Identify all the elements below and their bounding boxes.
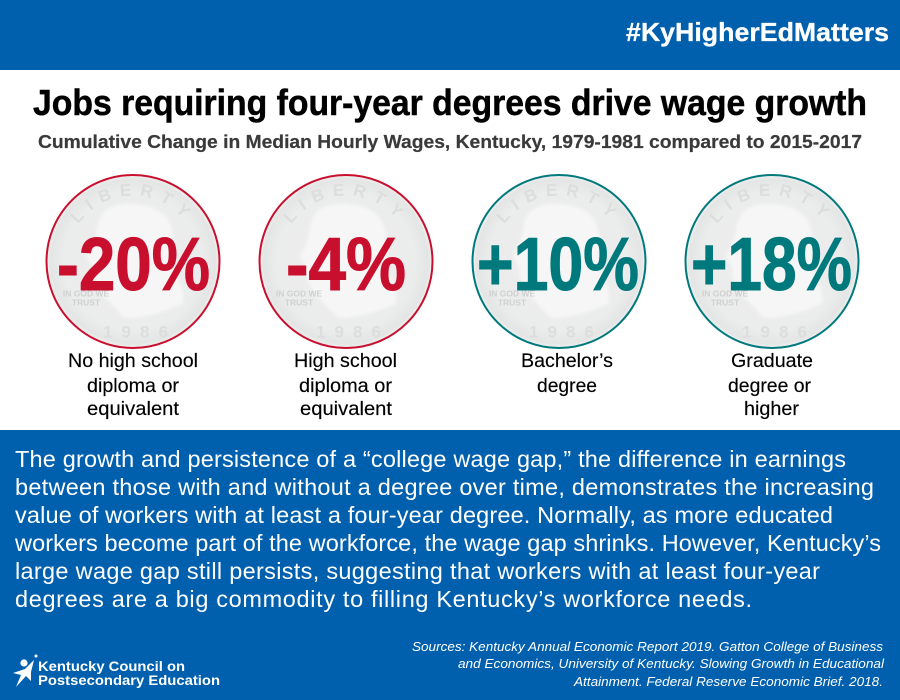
label: bachelor's: degree [537,375,597,397]
label: high school: High school [294,350,397,372]
sources: Sources: Kentucky Annual Economic Report 2019. Gatton College of Business [412,639,884,654]
coin: graduate +18%: 1986 [742,322,807,342]
coin: high school diploma -4%: 1986 [316,322,381,342]
sources: and Economics, University of Kentucky. Slowing Growth in Educational [458,656,885,671]
label: no high school: diploma or [87,375,180,397]
coin: graduate +18%: IN GOD WE [702,288,748,298]
label: no high school: equivalent [87,398,180,420]
body paragraph: The growth and persistence of a “college wage gap,” the difference in earnings [15,446,846,472]
sources: Attainment. Federal Reserve Economic Brief. 2018. [573,674,883,689]
body paragraph: between those with and without a degree over time, demonstrates the increasing [15,474,874,500]
logo text [38,659,220,688]
coin: bachelor's +10%: TRUST [498,298,527,308]
label: graduate [728,350,813,420]
label: no high school: No high school [68,350,198,372]
coin: graduate +18% [684,174,860,349]
coin: graduate +18%: TRUST [711,298,740,308]
label: graduate: higher [744,398,800,420]
label: bachelor's: Bachelor’s [521,350,613,372]
coin: bachelor's +10%: 1986 [529,322,594,342]
coin: high school diploma -4%: IN GOD WE [276,288,322,298]
logo text: Postsecondary Education [38,673,220,688]
body paragraph: value of workers with at least a four-year degree. Normally, as more educated [15,502,833,528]
subtitle: Cumulative Change in Median Hourly Wages, Kentucky, 1979-1981 compared to 2015-2017 [38,132,862,152]
logo text: Kentucky Council on [38,659,185,674]
coin: no high school diploma -20% [46,174,220,349]
coin: bachelor's +10%: IN GOD WE [489,288,535,298]
coin: high school diploma -4% [258,174,434,349]
coin: no high school diploma -20%: LIBERTY [70,184,191,223]
title: Jobs requiring four-year degrees drive wage growth [33,82,867,123]
label: graduate: Graduate [731,350,813,372]
label: high school: diploma or [299,375,393,397]
logo [13,654,220,688]
coin: no high school diploma -20%: TRUST [72,298,101,308]
body paragraph: large wage gap still persists, suggesting that workers with at least four-year [15,558,820,584]
body paragraph: degrees are a big commodity to filling Kentucky’s workforce needs. [15,586,752,612]
coin: graduate +18%: LIBERTY [710,184,830,223]
label: no high school [68,350,198,420]
label: graduate: degree or [728,375,811,397]
label: high school: equivalent [300,398,393,420]
coin: high school diploma -4%: TRUST [285,298,314,308]
header band [0,0,900,70]
label: high school [294,350,397,420]
coin: bachelor's +10% [472,174,646,349]
coin: high school diploma -4%: LIBERTY [284,184,404,223]
coin: no high school diploma -20%: 1986 [103,322,168,342]
value: +18% [691,222,852,306]
sources [412,639,885,689]
body paragraph [14,446,881,612]
value: +10% [477,222,639,306]
coin: bachelor's +10%: LIBERTY [496,184,617,223]
icon: reaching figure [13,654,38,687]
body paragraph: workers become part of the workforce, the wage gap shrinks. However, Kentucky’s [14,530,881,556]
footer panel [0,430,900,700]
hashtag: #KyHigherEdMatters [626,17,889,47]
coin: no high school diploma -20%: IN GOD WE [63,288,109,298]
value: -20% [57,222,210,306]
label: bachelor's [521,350,613,397]
value: -4% [286,222,406,306]
